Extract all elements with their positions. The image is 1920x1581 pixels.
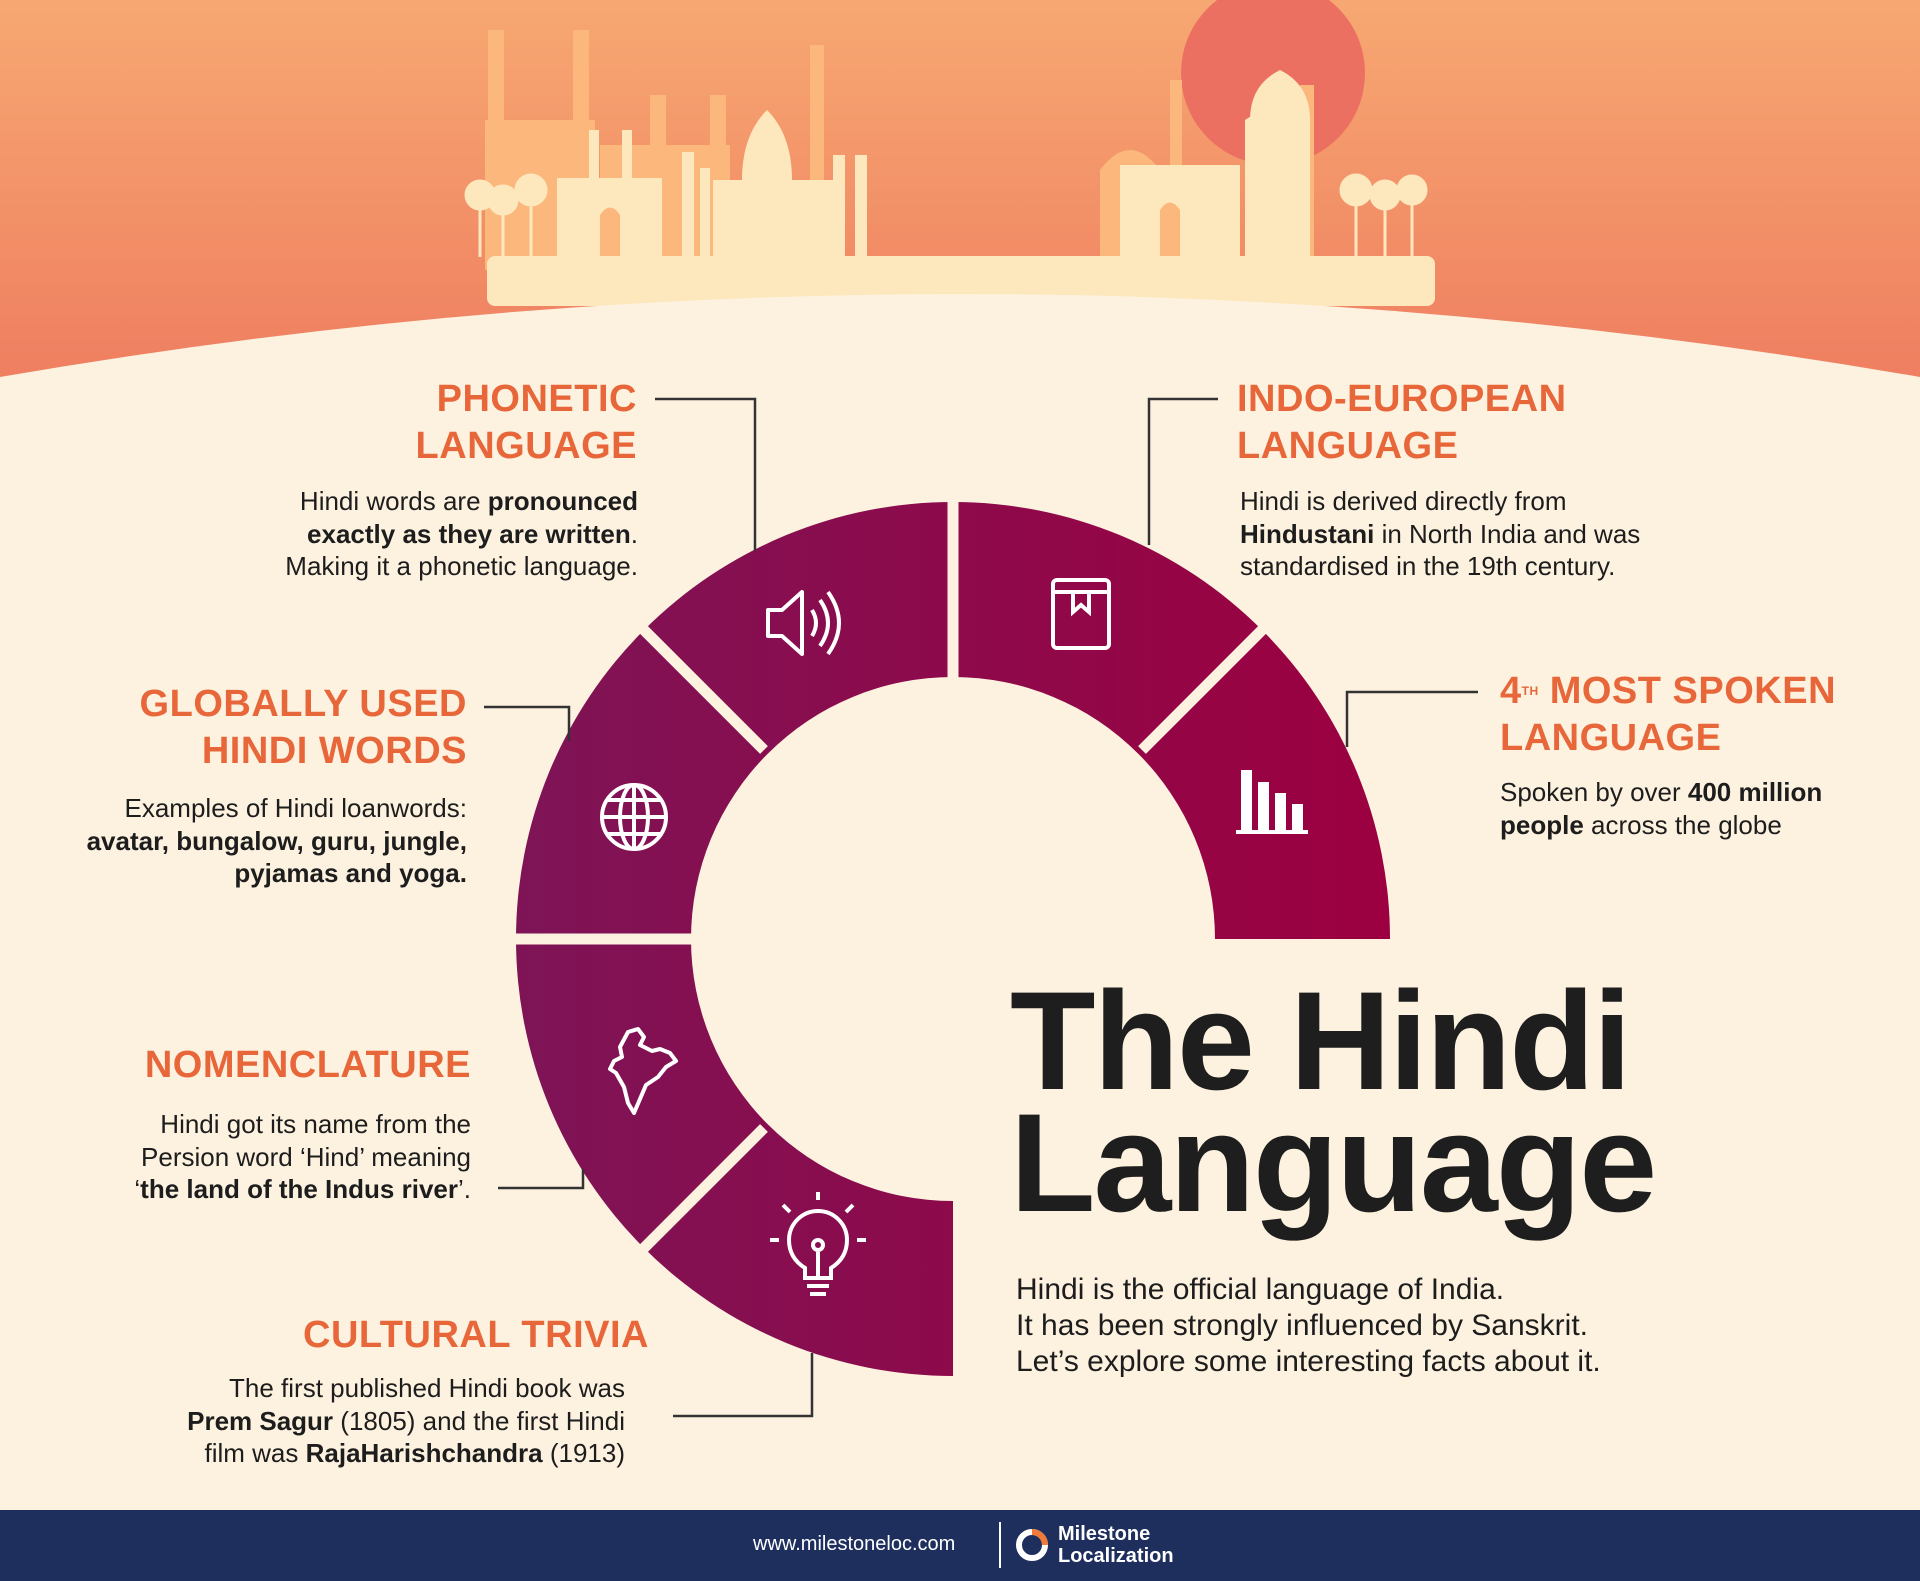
most spoken heading: 4TH MOST SPOKEN xyxy=(1500,670,1836,712)
most spoken heading xyxy=(1500,670,1836,759)
title xyxy=(1010,962,1655,1241)
nomenclature text: Persion word ‘Hind’ meaning xyxy=(141,1142,471,1172)
globally used text: avatar, bungalow, guru, jungle, xyxy=(87,826,467,856)
nomenclature heading: NOMENCLATURE xyxy=(145,1044,471,1086)
title: Language xyxy=(1010,1084,1655,1241)
most spoken text: people across the globe xyxy=(1500,810,1782,840)
logo ring xyxy=(1019,1532,1045,1558)
footer url: www.milestoneloc.com xyxy=(753,1533,955,1555)
indo-european text: Hindi is derived directly from xyxy=(1240,486,1567,516)
phonetic text: exactly as they are written. xyxy=(307,518,638,548)
indo-european text xyxy=(1240,486,1640,581)
most spoken heading: LANGUAGE xyxy=(1500,717,1721,759)
phonetic heading: LANGUAGE xyxy=(416,425,637,467)
globally used heading xyxy=(140,683,467,772)
footer brand xyxy=(1058,1523,1174,1567)
icon: light bulb xyxy=(770,1192,866,1294)
globally used heading: HINDI WORDS xyxy=(202,730,467,772)
indo-european text: Hindustani in North India and was xyxy=(1240,518,1640,548)
sky xyxy=(0,0,1920,400)
ring of segments xyxy=(508,495,1390,1376)
icon: bar chart xyxy=(1236,770,1308,834)
skyline xyxy=(466,30,1435,306)
globally used heading: GLOBALLY USED xyxy=(140,683,467,725)
footer brand: Localization xyxy=(1058,1545,1174,1567)
most spoken text: Spoken by over 400 million xyxy=(1500,777,1822,807)
indo-european heading: INDO-EUROPEAN xyxy=(1237,378,1567,420)
phonetic heading: PHONETIC xyxy=(437,378,637,420)
title: The Hindi xyxy=(1010,962,1630,1119)
cultural trivia heading: CULTURAL TRIVIA xyxy=(303,1314,649,1356)
icon: globe xyxy=(602,785,666,849)
phonetic heading xyxy=(416,378,637,467)
nomenclature text xyxy=(134,1109,471,1204)
subtitle: Hindi is the official language of India. xyxy=(1016,1273,1504,1306)
icon: speaker xyxy=(768,592,839,654)
indo-european heading: LANGUAGE xyxy=(1237,425,1458,467)
indo-european heading xyxy=(1237,378,1567,467)
most spoken text xyxy=(1500,777,1822,840)
cultural trivia text: The first published Hindi book was xyxy=(229,1373,625,1403)
cultural trivia text: film was RajaHarishchandra (1913) xyxy=(204,1438,625,1468)
nomenclature text: ‘the land of the Indus river’. xyxy=(134,1174,471,1204)
nomenclature text: Hindi got its name from the xyxy=(160,1109,471,1139)
connector lines xyxy=(484,399,1478,1416)
cultural trivia text xyxy=(187,1373,625,1468)
globally used text xyxy=(87,793,467,888)
icon: india map xyxy=(610,1029,676,1113)
cultural trivia text: Prem Sagur (1805) and the first Hindi xyxy=(187,1406,625,1436)
subtitle: Let’s explore some interesting facts about it. xyxy=(1016,1345,1601,1378)
globally used text: Examples of Hindi loanwords: xyxy=(124,793,467,823)
footer brand: Milestone xyxy=(1058,1523,1150,1545)
sun xyxy=(1181,0,1365,165)
phonetic text xyxy=(285,486,638,581)
subtitle: It has been strongly influenced by Sanskrit. xyxy=(1016,1309,1588,1342)
subtitle xyxy=(1016,1273,1601,1378)
icon: book xyxy=(1053,580,1109,648)
phonetic text: Hindi words are pronounced xyxy=(300,486,638,516)
globally used text: pyjamas and yoga. xyxy=(234,858,467,888)
phonetic text: Making it a phonetic language. xyxy=(285,551,638,581)
footer bar xyxy=(0,1510,1920,1581)
indo-european text: standardised in the 19th century. xyxy=(1240,551,1615,581)
